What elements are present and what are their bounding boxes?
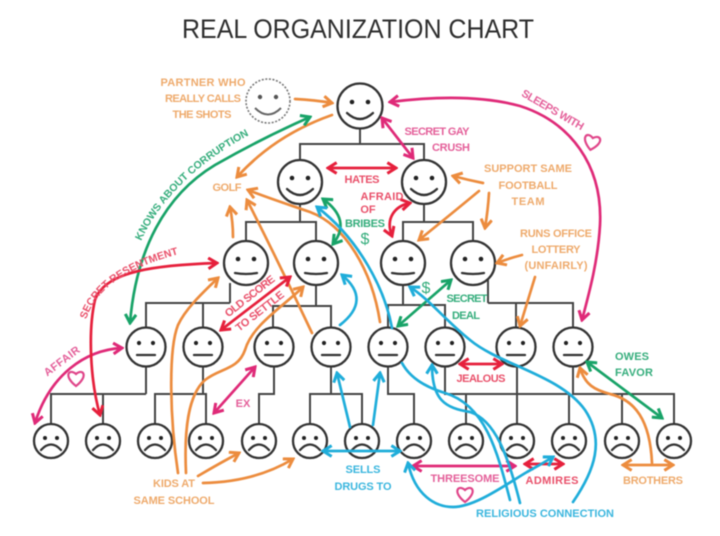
face: top boss — [338, 84, 382, 128]
arrow: religious d — [408, 457, 553, 507]
org chart connector lines — [51, 128, 674, 424]
face: level 5 g — [345, 424, 379, 458]
hearts — [68, 134, 601, 502]
label: unfairly: (UNFAIRLY) — [524, 260, 588, 272]
face: level 4 d — [312, 328, 350, 366]
labels — [42, 77, 684, 520]
label: same school: SAME SCHOOL — [134, 495, 215, 507]
arrow: religious c — [410, 287, 596, 502]
label: dollar one: $ — [361, 231, 370, 248]
face: level 4 f — [426, 328, 464, 366]
label: of: OF — [360, 204, 376, 216]
label: ex: EX — [236, 398, 251, 410]
icon: heart sleeps with — [583, 134, 601, 151]
face: level 3 a — [224, 241, 268, 285]
label: the shots: THE SHOTS — [172, 109, 232, 121]
face: level 3 d — [451, 241, 495, 285]
label: secret resentment: SECRET RESENTMENT — [80, 246, 178, 320]
face: level 4 b — [184, 328, 222, 366]
label: old score: OLD SCORE — [223, 273, 277, 320]
arrow: threesome — [413, 465, 515, 467]
face: level 5 f — [293, 424, 327, 458]
arrow: secret deal — [398, 280, 451, 326]
arrow: kids to level 3 b — [186, 287, 303, 473]
label: team: TEAM — [512, 196, 544, 208]
arrow: sleeps with — [390, 98, 600, 320]
arrow: support to level 2 right — [453, 176, 483, 183]
arrow: level 3 to golf — [230, 207, 233, 237]
label: sells: SELLS — [346, 464, 380, 476]
arrow: secret gay crush — [382, 118, 413, 158]
arrow: level 4 e to level 2 left — [317, 207, 392, 328]
arrow: hates — [328, 167, 396, 169]
face: level 2 left — [278, 160, 322, 204]
arrow: level 4 e to golf — [248, 190, 380, 322]
face: level 5 e — [242, 424, 276, 458]
arrow: brothers to level 4 h — [580, 368, 652, 463]
arrow: boss to golf — [237, 115, 332, 177]
label: really calls: REALLY CALLS — [165, 93, 241, 105]
face: level 5 k — [552, 424, 586, 458]
label: support same: SUPPORT SAME — [484, 163, 572, 175]
icon: heart affair — [68, 372, 84, 386]
faces — [34, 79, 691, 458]
arrow: lottery to level 4 g — [520, 277, 535, 326]
arrow: support to level 3 c — [419, 191, 479, 240]
arrow: religious b — [432, 365, 520, 503]
face: level 4 c — [254, 328, 294, 366]
label: partner: PARTNER WHO — [160, 77, 246, 89]
pink arrows — [35, 98, 600, 466]
arrow: owes favor — [587, 362, 662, 418]
label: kids at: KIDS AT — [153, 478, 195, 490]
arrow: support to level 3 d — [485, 193, 489, 228]
face: level 5 a — [34, 424, 68, 458]
label: admires: ADMIRES — [526, 475, 578, 487]
label: deal: DEAL — [452, 310, 480, 322]
arrow: level 5 g to level 4 e — [373, 373, 380, 425]
label: owes: OWES — [615, 351, 649, 363]
green arrows — [130, 117, 662, 418]
face: level 3 c — [381, 241, 425, 285]
face: level 2 right — [402, 160, 446, 204]
label: secret gay: SECRET GAY — [404, 126, 470, 138]
label: drugs to: DRUGS TO — [334, 481, 392, 493]
face: level 5 i — [449, 424, 483, 458]
label: football: FOOTBALL — [498, 180, 558, 192]
arrow: kids to level 5 e — [198, 453, 239, 476]
label: affair: AFFAIR — [42, 344, 83, 379]
label: afraid: AFRAID — [360, 191, 404, 203]
face: level 4 h — [554, 328, 592, 366]
label: bribes: BRIBES — [345, 218, 385, 230]
title: REAL ORGANIZATION CHART — [182, 14, 534, 44]
arrow: level 4 to golf — [247, 200, 312, 333]
label: favor: FAVOR — [615, 367, 653, 379]
arrow: level 5 g to level 4 d — [337, 373, 350, 427]
face: level 5 j — [500, 424, 534, 458]
label: sleeps with: SLEEPS WITH — [519, 88, 586, 133]
orange arrows — [171, 99, 673, 483]
arrow: ex — [214, 367, 255, 413]
arrow: bribes — [323, 199, 341, 244]
label: dollar two: $ — [422, 280, 431, 297]
label: to settle: TO SETTLE — [234, 289, 287, 334]
face: level 4 g — [496, 328, 536, 366]
face: level 3 b — [294, 241, 338, 285]
face: level 5 b — [86, 424, 120, 458]
arrow: knows about corruption — [130, 117, 310, 323]
label: runs office: RUNS OFFICE — [520, 228, 592, 240]
arrow: religious a — [402, 363, 510, 500]
face: level 5 l — [605, 424, 639, 458]
face: level 5 h — [397, 424, 431, 458]
arrow: kids to level 3 a — [171, 278, 218, 473]
blue arrows — [317, 207, 596, 507]
label: secret: SECRET — [446, 293, 488, 305]
face: level 4 a — [126, 328, 166, 366]
label: threesome: THREESOME — [430, 473, 500, 485]
arrow: partner to boss — [295, 99, 332, 103]
red arrows — [91, 168, 563, 464]
face: level 5 d — [189, 424, 223, 458]
arrow: admires — [525, 463, 563, 465]
label: crush: CRUSH — [432, 142, 470, 154]
arrow: kids to level 5 f — [203, 459, 293, 483]
label: brothers: BROTHERS — [623, 475, 683, 487]
icon: heart threesome — [457, 488, 473, 502]
label: religious connection: RELIGIOUS CONNECTION — [476, 508, 614, 520]
label: knows about corruption: KNOWS ABOUT CORRUPTION — [134, 128, 249, 241]
arrow: old score — [221, 277, 290, 330]
arrow: secret resentment — [91, 263, 217, 415]
arrow: brothers double — [623, 464, 673, 466]
label: jealous: JEALOUS — [456, 373, 506, 385]
label: hates: HATES — [344, 174, 380, 186]
face: level 5 c — [138, 424, 172, 458]
face: partner dotted — [246, 79, 290, 123]
face: level 4 e — [368, 328, 408, 366]
arrow: sells drugs — [323, 450, 400, 452]
arrow: afraid — [390, 203, 410, 236]
arrow: jealous — [460, 363, 502, 365]
label: golf: GOLF — [212, 182, 242, 194]
arrow: affair — [35, 348, 122, 423]
face: level 5 m — [657, 424, 691, 458]
arrow: level 4 d to level 3 b — [340, 275, 357, 325]
arrow: lottery to level 3 d — [497, 255, 522, 263]
label: lottery: LOTTERY — [532, 244, 581, 256]
